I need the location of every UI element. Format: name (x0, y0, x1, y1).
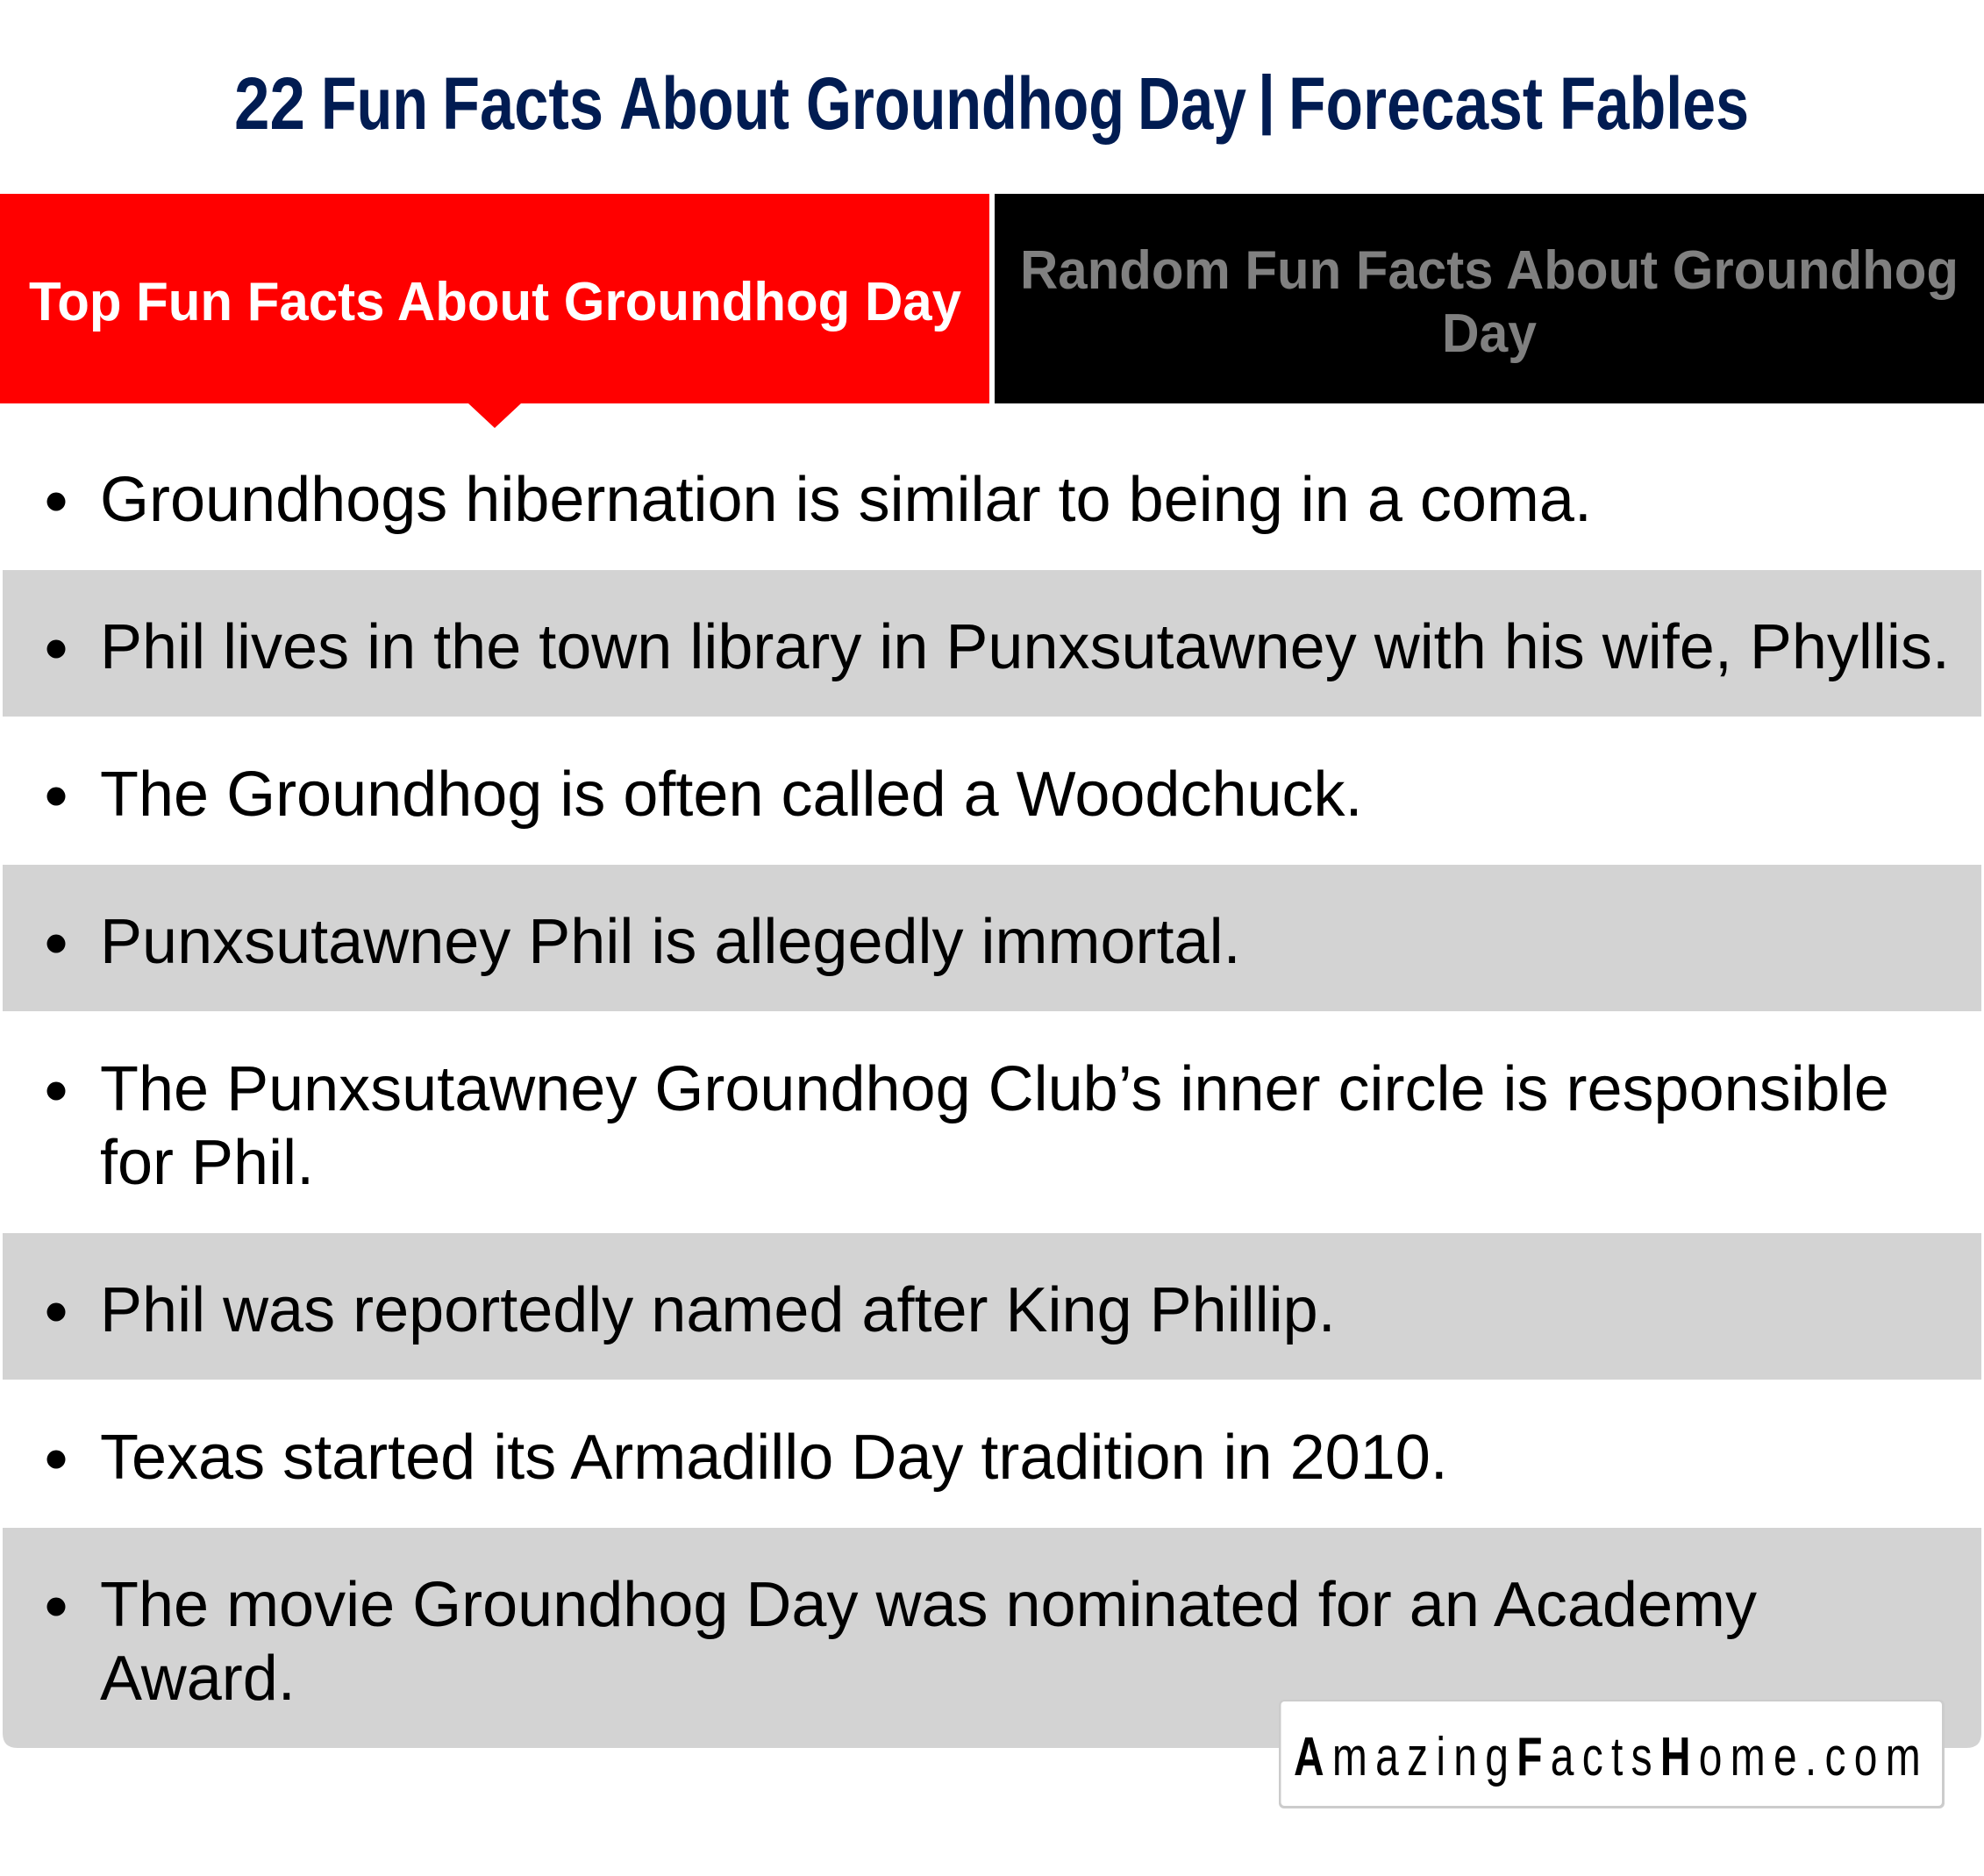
title: Day (1138, 62, 1246, 145)
fact 4: Punxsutawney Phil is allegedly immortal. (100, 907, 1241, 977)
fact 6 (3, 1233, 1981, 1380)
title: 22 (234, 62, 305, 145)
fact 5 (47, 1054, 1889, 1198)
tab: top fun facts (active) (0, 194, 989, 428)
tab: random fun facts (995, 194, 1984, 403)
title: Groundhog (806, 62, 1124, 145)
fact 2 (3, 570, 1981, 717)
fact 6: Phil was reportedly named after King Phillip. (100, 1275, 1336, 1345)
tab label: random fun facts: Random Fun Facts About Groundhog (1020, 240, 1959, 301)
title: About (619, 62, 789, 145)
title: Forecast (1288, 62, 1543, 145)
fact 5: The Punxsutawney Groundhog Club’s inner circle is responsible (100, 1054, 1889, 1124)
title: | (1258, 62, 1275, 136)
fact 8: The movie Groundhog Day was nominated for an Academy (100, 1570, 1757, 1640)
fact 7: Texas started its Armadillo Day tradition in 2010. (100, 1423, 1448, 1493)
fact 1: Groundhogs hibernation is similar to being in a coma. (100, 465, 1592, 535)
title: Fun (321, 62, 428, 145)
fact 2: Phil lives in the town library in Punxsutawney with his wife, Phyllis. (100, 612, 1950, 682)
fact 8: Award. (100, 1644, 296, 1714)
tab label: top fun facts: Top Fun Facts About Groundhog Day (29, 272, 961, 332)
watermark badge (1279, 1700, 1945, 1808)
tab label: second line: Day (1442, 303, 1537, 364)
title: Facts (442, 62, 603, 145)
watermark text: AmazingFactsHome.com (1294, 1727, 1929, 1787)
fact 3: The Groundhog is often called a Woodchuck. (100, 760, 1363, 830)
fact 8 (3, 1528, 1981, 1748)
title (234, 62, 1749, 145)
title: Fables (1559, 62, 1749, 145)
fact 5: for Phil. (100, 1128, 314, 1198)
fact 4 (3, 865, 1981, 1011)
